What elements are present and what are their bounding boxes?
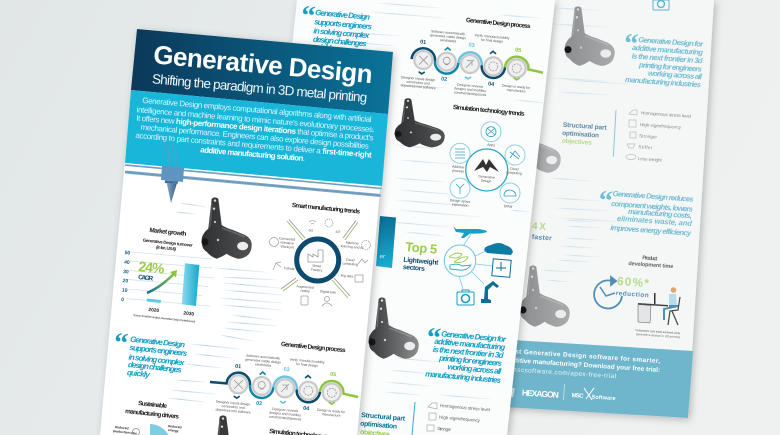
- panel: front page: [100, 29, 393, 435]
- process numbers: 02: [441, 76, 447, 83]
- icon: generative form: [474, 159, 499, 172]
- central circle: [466, 149, 508, 191]
- divider: [412, 402, 415, 435]
- heading: sustainable drivers: Sustainable: [138, 400, 168, 410]
- quote: reduces weights: manufacturing costs,: [628, 207, 692, 220]
- chart title: Market growth: [149, 227, 187, 238]
- heading: structural objectives: objectives: [562, 138, 592, 147]
- quote: supports engineers: [312, 8, 373, 53]
- divider: [613, 110, 616, 157]
- chart axis labels: 30: [123, 269, 129, 276]
- satellite labels: Cloud: [510, 167, 519, 171]
- chart subtitle: (in bn. US-$): [156, 245, 177, 252]
- quote: additive frontier: manufacturing industries: [625, 75, 701, 89]
- trend labels: Machine: [346, 240, 359, 246]
- heading: product development time: [628, 255, 673, 270]
- icon: clock: [132, 428, 140, 435]
- process captions: designs and modifies: [269, 411, 301, 417]
- intro band: [125, 90, 388, 186]
- process diagram: [400, 29, 543, 97]
- process captions: manufacture: [507, 88, 526, 94]
- heading: structural objectives: optimisation: [562, 130, 599, 140]
- icon: part dark: [394, 98, 445, 147]
- heading: lightweight sectors: Lightweight: [403, 257, 439, 267]
- hub circle: [444, 245, 476, 276]
- process numbers: 02: [256, 401, 262, 407]
- satellite labels: process: [452, 168, 464, 174]
- quote: additive frontier: additive manufacturing: [632, 43, 704, 57]
- process captions: Software automatically: [246, 354, 281, 361]
- satellite labels: DfAM: [504, 204, 513, 209]
- process captions: manufacture: [322, 412, 341, 418]
- process numbers: 05: [515, 47, 521, 54]
- intro paragraph: according to part constraints and requirements to deliver a first-time-right: [135, 131, 372, 160]
- quote: reduces weights: improves energy efficiency: [610, 223, 692, 238]
- quote: supports engineers: quickly: [126, 368, 151, 379]
- icon: part mid lower: [368, 297, 419, 359]
- objectives list: Stronger: [437, 426, 452, 432]
- quote: supports engineers: in solving complex: [128, 353, 185, 367]
- title band: [131, 29, 393, 114]
- smart factory ring: [297, 239, 339, 281]
- icon: medical kit: [457, 290, 474, 305]
- quote: frontier in 3d: is the next frontier in 3d: [432, 345, 505, 360]
- heading: process: Generative Design process: [466, 17, 531, 30]
- tab: teal bar: [376, 216, 396, 268]
- year labels: [148, 307, 195, 318]
- trend labels: Augmented: [296, 284, 314, 290]
- heading: lightweight sectors: [403, 257, 439, 273]
- stat: 60% reduction: 60%*: [616, 274, 650, 290]
- icon: engineer at desk: [638, 287, 680, 325]
- logo: msc software: [571, 388, 616, 402]
- trend labels: Big data: [341, 273, 354, 279]
- factory label: [311, 264, 323, 273]
- heading: product development time: Product: [642, 255, 658, 262]
- title: Generative Design: [152, 39, 374, 89]
- satellite circles: [450, 122, 525, 203]
- cta text: mscsoftware.com/apex-free-trial: [511, 366, 617, 380]
- objectives list: Less weight: [638, 156, 663, 163]
- satellite labels: [450, 143, 522, 209]
- icon: part dark top: [202, 197, 252, 259]
- source note: Source: SmarTech Analysis, Generative Design market forecast: [133, 313, 195, 323]
- quote: additive frontier: Generative Design for: [638, 35, 705, 49]
- central label: Design: [481, 179, 492, 183]
- pie labels: Reduced: [168, 424, 182, 429]
- quote mark: additive: “: [623, 28, 639, 60]
- objectives list: Homogenous stress level: [641, 110, 691, 119]
- quote: frontier in 3d: additive manufacturing: [434, 337, 506, 352]
- smart manufacturing trends: [270, 202, 370, 306]
- sectors hub diagram: [444, 226, 513, 305]
- process captions: Designer reviews: [457, 83, 484, 89]
- ring spokes: [281, 220, 358, 298]
- chart axis labels: 40: [124, 260, 130, 266]
- process step icons: [419, 56, 521, 73]
- intro paragraph: mechanical performance. Engineers can also explore design possibilities: [140, 123, 369, 151]
- quote: supports engineers: design challenges: [313, 35, 368, 48]
- trend labels: learning and AI: [341, 244, 364, 250]
- satellite labels: Additive: [452, 164, 464, 170]
- process diagram: [210, 354, 358, 421]
- quote: supports engineers: in solving complex: [313, 26, 370, 40]
- year labels: 2020: [148, 307, 160, 314]
- icon: hands and leaf: [449, 253, 471, 270]
- process captions: Design is ready for: [502, 83, 531, 90]
- panel: call to action band: [474, 338, 693, 418]
- process captions: designs and modifies: [454, 86, 486, 93]
- quote: reduces weights: [610, 189, 694, 238]
- trend labels: 5G: [308, 228, 314, 233]
- process numbers: 05: [330, 372, 336, 378]
- panel: back page: [474, 0, 714, 418]
- heading: structural objectives: [562, 122, 608, 147]
- central label: Generative: [478, 174, 495, 180]
- process captions: for final design: [296, 362, 318, 368]
- trend labels: Workcell: [280, 244, 294, 250]
- process step circles: [414, 51, 526, 77]
- footnote: generative design in 3D printing: [636, 332, 681, 339]
- objectives list: Homogenous stress level: [440, 403, 490, 412]
- back page background stripes: [540, 8, 630, 282]
- divider: [564, 384, 565, 400]
- process captions: constraints/objectives: [269, 415, 302, 421]
- quote: frontier in 3d: Generative Design for: [441, 329, 507, 344]
- bar 2020: [147, 298, 161, 303]
- heading: sustainable drivers: manufacturing drivers: [125, 408, 180, 421]
- trend labels: reality: [300, 289, 310, 293]
- heading: structural objectives: Structural part: [563, 122, 608, 132]
- trend labels: [279, 228, 364, 295]
- panel: middle page: [250, 0, 555, 435]
- process ribbon: [412, 48, 543, 78]
- cta text: additive manufacturing? Download your free trial:: [506, 357, 660, 374]
- process numbers: 03: [283, 367, 290, 373]
- year labels: 2030: [183, 311, 195, 318]
- process captions: [215, 354, 346, 421]
- quote: supports engineers: Generative Design: [130, 335, 186, 349]
- process numbers: 03: [468, 42, 475, 49]
- simulation trends diagram: [450, 122, 525, 209]
- icon: 3d printer: [492, 259, 511, 277]
- process captions: constraints and: [406, 80, 430, 86]
- process captions: Verify manufacturability: [474, 33, 510, 40]
- quote mark: “: [112, 327, 129, 359]
- chart axis labels: 10: [121, 288, 128, 294]
- chart subtitle: Generative Design turnover: [143, 238, 193, 248]
- process captions: [400, 29, 531, 97]
- process numbers: 01: [235, 364, 241, 370]
- process captions: objectives into software: [215, 407, 251, 415]
- trend labels: intensive: [280, 240, 294, 246]
- process chevrons: [234, 372, 335, 404]
- quote: supports engineers: Generative Design: [315, 8, 371, 22]
- quote: frontier in 3d: printing for engineers: [438, 353, 503, 368]
- quote: supports engineers: [126, 335, 188, 379]
- quote: additive frontier: is the next frontier in 3d: [631, 51, 703, 65]
- satellite icons: [455, 127, 520, 196]
- icon: faded part middle: [510, 111, 561, 173]
- subtitle: Shifting the paradigm in 3D metal printing: [151, 71, 368, 105]
- chart gridlines: [126, 252, 214, 306]
- stat: 24% cagr: CAGR: [138, 274, 154, 283]
- chart: market growth: [121, 227, 214, 323]
- process captions: constraints/objectives: [454, 90, 487, 97]
- quote: additive frontier: [625, 35, 705, 89]
- process chevrons: [419, 48, 520, 80]
- quote: reduces weights: component weights, lowers: [611, 199, 693, 214]
- objectives list: [626, 110, 691, 163]
- trend labels: Connected: [279, 236, 296, 242]
- quote: frontier in 3d: [425, 329, 507, 385]
- process step circles: [229, 375, 341, 402]
- quote: supports engineers: supports engineers: [129, 343, 188, 358]
- intro paragraph: intelligence and machine learning to mimic nature's evolutionary processes.: [136, 105, 375, 134]
- objectives list: Stiffer: [638, 144, 653, 150]
- front background stripes: [168, 203, 282, 402]
- factory label: Smart: [312, 264, 322, 268]
- quote: additive frontier: printing for engineers: [638, 60, 702, 74]
- cta text: [475, 346, 661, 380]
- process numbers: 01: [420, 39, 426, 46]
- objectives list: [427, 403, 490, 432]
- heading: structural part optimisation: optimisation: [360, 421, 397, 431]
- process captions: Designer inputs design: [216, 400, 251, 407]
- intro paragraph: [135, 96, 375, 163]
- process captions: Designer reviews: [272, 407, 299, 413]
- icon: medical kit fragment: [653, 0, 669, 10]
- heading: sustainable drivers: [125, 400, 180, 421]
- icon: part bottom: [210, 415, 260, 435]
- satellite labels: Design space: [450, 198, 471, 204]
- chart axis labels: 20: [122, 278, 129, 285]
- chart: sustainable drivers: [113, 424, 182, 435]
- quote: reduces weights: eliminates waste, and: [617, 214, 693, 228]
- factory label: Factory: [311, 268, 323, 273]
- objectives list: Stronger: [639, 133, 658, 140]
- heading: lightweight sectors: sectors: [403, 264, 425, 273]
- chart axis labels: 50: [124, 250, 131, 257]
- quote mark: frontier: “: [425, 322, 442, 354]
- satellite labels: exploration: [452, 202, 469, 208]
- growth arrow: [147, 270, 177, 293]
- heading: product development time: development time: [628, 261, 673, 270]
- pie labels: energy: [168, 428, 179, 433]
- printer rails: [125, 165, 382, 196]
- quote: frontier in 3d: manufacturing industries: [425, 369, 502, 385]
- objectives list: High eigenfrequency: [439, 415, 481, 423]
- quote: supports engineers: quickly: [312, 42, 336, 53]
- stat: top 5: Top 5: [405, 239, 438, 257]
- stat: 4x faster: 4X: [531, 221, 547, 233]
- process numbers: 04: [303, 406, 310, 412]
- icon: part light top: [564, 6, 615, 66]
- icon: part light lower: [520, 265, 570, 327]
- intro paragraph: additive manufacturing solution.: [200, 145, 305, 163]
- process ribbon: [210, 373, 358, 402]
- trend icons: [270, 219, 370, 306]
- intro paragraph: It offers new high-performance design iterations that optimise a product's: [136, 114, 374, 142]
- stat: 4x faster: faster: [532, 234, 552, 242]
- process numbers: 04: [488, 81, 495, 88]
- process captions: objectives into software: [400, 83, 436, 90]
- bar 2030: [182, 263, 199, 306]
- heading: Smart manufacturing trends: [292, 202, 361, 216]
- process captions: Software automatically: [431, 29, 466, 36]
- logo: msc software: MSC: [571, 393, 584, 400]
- heading: structural part optimisation: [360, 412, 406, 435]
- satellite labels: computing: [506, 170, 522, 176]
- process captions: generates viable design: [430, 33, 466, 40]
- pie segment: [150, 424, 169, 435]
- process captions: for final design: [481, 38, 503, 44]
- process captions: Verify manufacturability: [289, 357, 325, 365]
- trend labels: computing: [342, 261, 358, 267]
- satellite labels: Apps: [487, 143, 495, 147]
- process captions: candidates: [255, 362, 272, 368]
- central label: [478, 174, 495, 183]
- process step icons: [234, 380, 336, 397]
- stat: 4x faster: [531, 221, 552, 242]
- process captions: Design is ready for: [317, 408, 346, 414]
- intro paragraph: Generative Design employs computational algorithms along with artificial: [142, 96, 372, 124]
- process numbers: [420, 39, 521, 88]
- heading: process: Generative Design process: [281, 341, 346, 354]
- process captions: constraints and: [221, 404, 245, 410]
- icon: car: [484, 243, 513, 255]
- trend labels: IoT: [335, 230, 341, 234]
- quote mark: reduces: “: [598, 185, 614, 217]
- chart axis labels: [121, 250, 131, 303]
- heading: structural part optimisation: Structural part: [361, 412, 406, 423]
- quote: frontier in 3d: working across all: [447, 362, 502, 376]
- quote: additive frontier: working across all: [648, 69, 703, 81]
- process captions: candidates: [440, 38, 457, 43]
- footnote: [635, 328, 681, 339]
- trend labels: Digital twin: [320, 289, 337, 295]
- logo: hexagon: HEXAGON: [522, 388, 559, 400]
- hub spokes: [459, 234, 492, 289]
- chart axis labels: 0: [121, 297, 124, 303]
- icon: robot arm: [481, 281, 499, 303]
- process captions: generates viable design: [245, 357, 281, 365]
- icon: plane: [453, 226, 487, 238]
- quote mark: engineers: “: [300, 0, 317, 32]
- heading: simulation trends: Simulation technology trends: [453, 104, 525, 118]
- objectives list: High eigenfrequency: [640, 122, 682, 130]
- pie labels: Reduced: [115, 425, 129, 430]
- stat: 60% reduction: reduction: [616, 290, 649, 299]
- stat: 24% cagr: 24%: [138, 258, 166, 277]
- icon: clock: [594, 277, 622, 308]
- process numbers: [235, 364, 336, 412]
- trend labels: Cloud: [346, 258, 355, 262]
- process captions: Designer inputs design: [401, 75, 436, 82]
- trend labels: Cobots: [284, 266, 295, 271]
- quote: supports engineers: supports engineers: [314, 17, 373, 31]
- cta text: Want the first Generative Design software for smarter,: [475, 346, 661, 365]
- quote: supports engineers: design challenges: [127, 360, 183, 375]
- tab: teal bar: er: [379, 254, 386, 261]
- quote: reduces weights: Generative Design reduces: [612, 189, 694, 204]
- icon: factory: [308, 250, 323, 262]
- logo: msc software: Software: [591, 395, 616, 402]
- stat: 60% reduction: [616, 274, 650, 299]
- middle page background stripes: [345, 3, 545, 399]
- icon: print nozzle: [161, 140, 184, 203]
- footnote: *Automotive case study achieved using: [635, 328, 681, 335]
- pie labels: [113, 424, 182, 435]
